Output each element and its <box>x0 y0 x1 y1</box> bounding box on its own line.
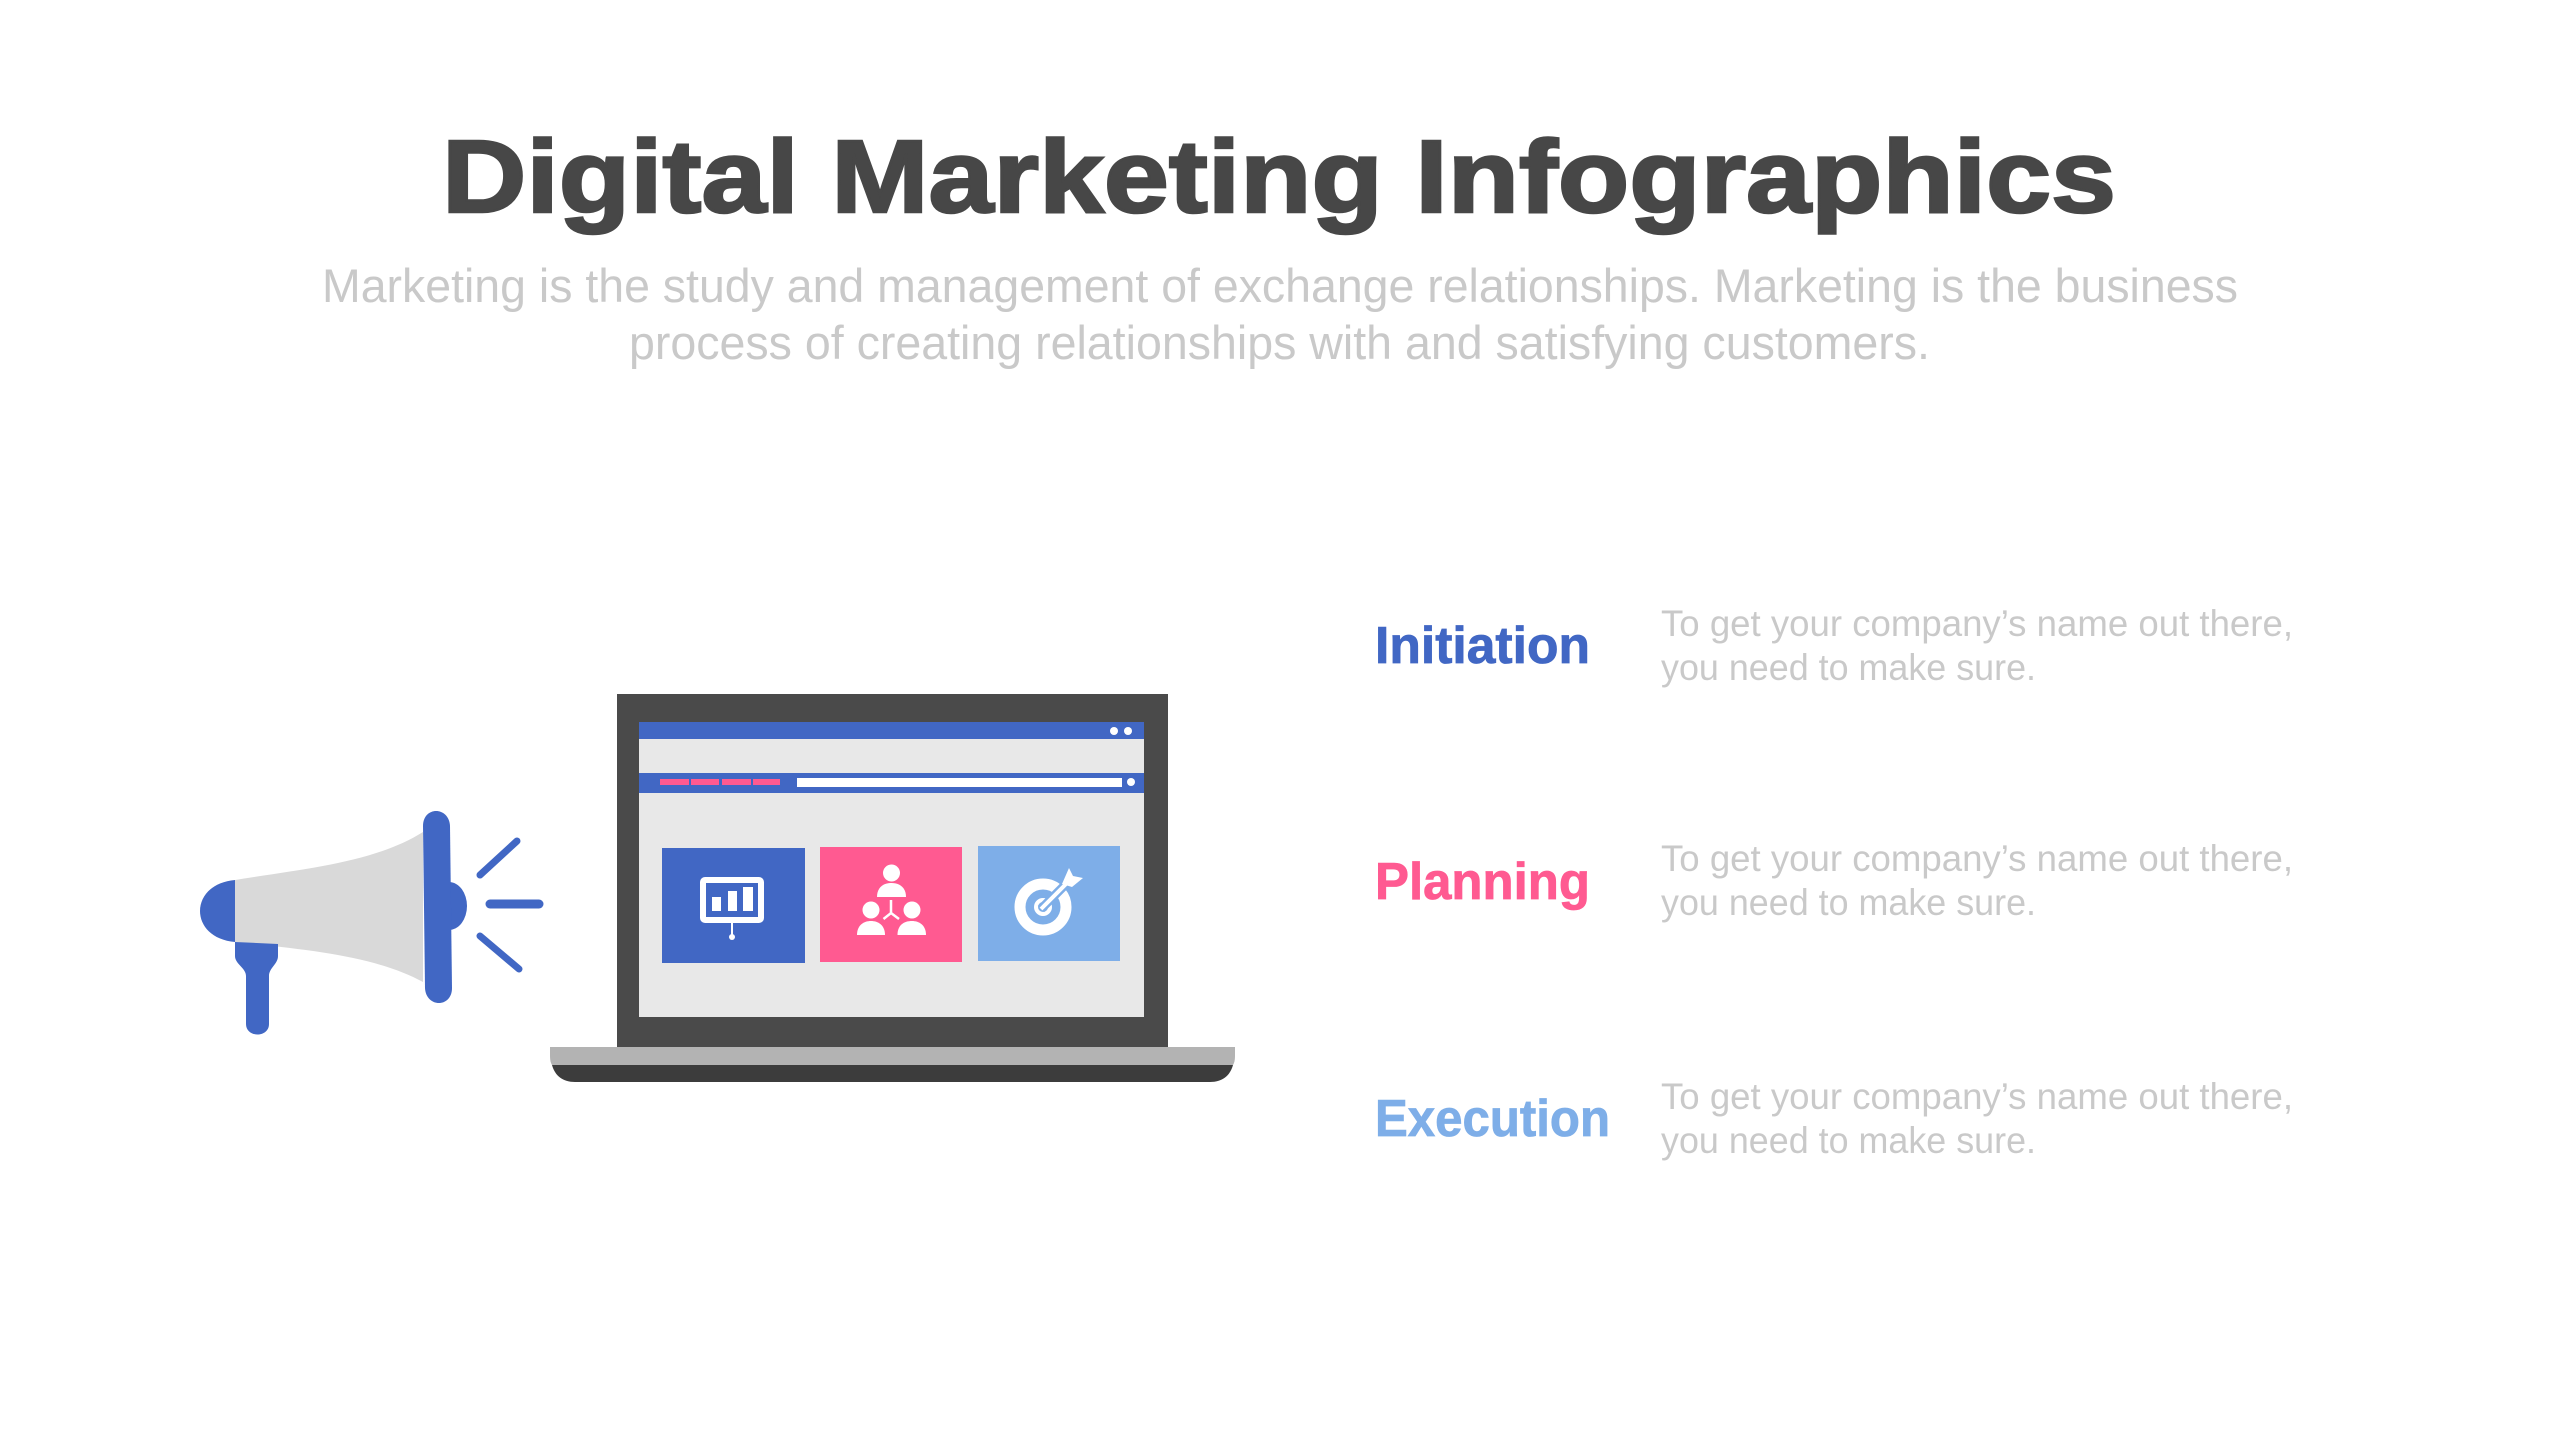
megaphone cone <box>235 832 423 982</box>
description: Planning: you need to make sure. <box>1661 882 2036 923</box>
heading: Execution: Execution <box>1375 1090 1610 1148</box>
browser title bar <box>639 722 1144 739</box>
item: Execution <box>1375 1076 2293 1161</box>
subtitle text block <box>322 259 2238 369</box>
item: Planning <box>1375 838 2293 923</box>
description: Planning: To get your company’s name out there, <box>1661 838 2293 879</box>
tile: presentation chart <box>662 848 805 963</box>
subtitle text block: Marketing is the study and management of exchange relationships. Marketing is the business <box>322 259 2238 312</box>
browser navigation bar <box>639 773 1144 793</box>
item: Initiation <box>1375 603 2293 688</box>
description: Planning <box>1661 838 2293 923</box>
description: Initiation: you need to make sure. <box>1661 647 2036 688</box>
megaphone front bar <box>423 811 452 1003</box>
description: Initiation <box>1661 603 2293 688</box>
laptop screen <box>639 722 1144 1017</box>
tile: target <box>978 846 1120 961</box>
laptop base top <box>550 1047 1235 1065</box>
description: Execution: To get your company’s name out there, <box>1661 1076 2293 1117</box>
heading: Planning: Planning <box>1375 853 1590 911</box>
icon: megaphone <box>200 811 539 1034</box>
subtitle text block: process of creating relationships with and satisfying customers. <box>629 316 1930 369</box>
heading: Initiation: Initiation <box>1375 617 1590 675</box>
laptop base bottom <box>552 1065 1233 1082</box>
icon: laptop <box>550 694 1235 1082</box>
description: Initiation: To get your company’s name out there, <box>1661 603 2293 644</box>
megaphone back cap <box>200 880 235 942</box>
description: Execution: you need to make sure. <box>1661 1120 2036 1161</box>
sound rays <box>480 841 539 969</box>
title: Digital Marketing Infographics <box>442 119 2116 234</box>
megaphone bump <box>431 882 467 930</box>
tile: team hierarchy <box>820 847 962 962</box>
laptop lid <box>617 694 1168 1048</box>
description: Execution <box>1661 1076 2293 1161</box>
megaphone handle <box>235 942 278 1034</box>
